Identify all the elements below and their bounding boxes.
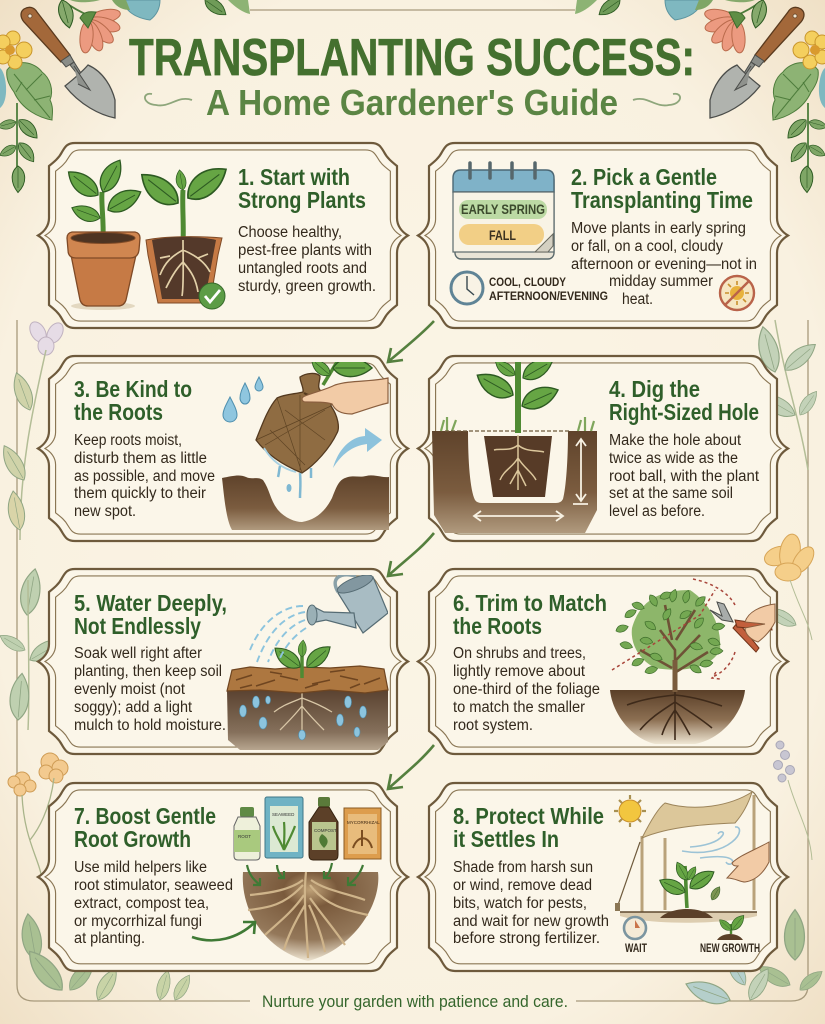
arrow between panels 4 and 5 (388, 533, 434, 576)
body text: as possible, and move (74, 468, 215, 485)
heading: Strong Plants (238, 187, 366, 213)
icon: mycorrhizal bag: MYCORRHIZAL (347, 820, 380, 825)
body text: soggy); add a light (74, 699, 193, 716)
arrow: to roots (192, 922, 255, 940)
body text: sturdy, green growth. (238, 278, 376, 295)
body text: new spot. (74, 503, 136, 520)
icon: pruners (710, 602, 772, 652)
body text: root ball, with the plant (609, 468, 760, 485)
body text: Choose healthy, (238, 224, 342, 241)
heading: 5. Water Deeply, (74, 590, 227, 616)
body text: pest-free plants with (238, 242, 372, 259)
body text: planting, then keep soil (74, 663, 222, 680)
body text: bits, watch for pests, (453, 895, 587, 912)
icon: plant with root ball (476, 362, 559, 497)
body text: Use mild helpers like (74, 859, 207, 876)
heading (453, 803, 604, 852)
heading: 8. Protect While (453, 803, 604, 829)
time label (489, 275, 608, 303)
icon: water drops (223, 377, 263, 422)
icon: hand (727, 842, 769, 882)
arrow between panels 2 and 3 (388, 321, 434, 362)
icon: root stimulator bottle: ROOT (238, 834, 251, 839)
heading: 4. Dig the (609, 376, 700, 402)
heading (74, 590, 227, 639)
arrow: depth (573, 439, 588, 504)
heading: 2. Pick a Gentle (571, 164, 717, 190)
heading (571, 164, 753, 213)
heading (238, 164, 366, 213)
icon: seaweed bag: SEAWEED (272, 812, 295, 817)
soil and roots (243, 872, 378, 961)
body text: Move plants in early spring (571, 220, 746, 237)
soil line (445, 430, 570, 432)
body text: mulch to hold moisture. (74, 717, 226, 734)
panel 7: boost gentle root growth (38, 783, 408, 971)
heading: Transplanting Time (571, 187, 753, 213)
body text: or fall, on a cool, cloudy (571, 238, 723, 255)
heading (453, 590, 607, 639)
trowel (21, 7, 115, 118)
icon: burlap root ball (256, 356, 372, 498)
heading: Root Growth (74, 826, 191, 852)
heading: 3. Be Kind to (74, 376, 192, 402)
top left floral corner with trowel (0, 0, 250, 193)
heading: the Roots (74, 399, 163, 425)
soil and roots (227, 690, 388, 750)
right side sprigs (683, 320, 825, 1009)
icon: mycorrhizal bag (344, 808, 381, 859)
body text: Shade from harsh sun (453, 859, 593, 876)
heading (609, 376, 759, 425)
icon: small green arrows (247, 863, 363, 885)
panel 4: dig the right-sized hole (418, 354, 788, 541)
mulch layer (227, 666, 388, 693)
icon: water drops in soil (240, 696, 366, 740)
panel 8: protect while it settles in (418, 783, 788, 971)
subtitle: A Home Gardener's Guide (206, 82, 618, 123)
body text: disturb them as little (74, 450, 207, 467)
icon: seaweed bag (265, 797, 303, 858)
top right floral corner with trowel (575, 0, 825, 193)
body text: them quickly to their (74, 485, 206, 502)
body text: one-third of the foliage (453, 681, 600, 698)
icon: seedling (270, 640, 335, 678)
body text: extract, compost tea, (74, 895, 209, 912)
body text: Keep roots moist, (74, 432, 182, 449)
icon: potted plant (63, 156, 145, 310)
body text: Soak well right after (74, 645, 202, 662)
body text (74, 645, 226, 734)
time label: AFTERNOON/EVENING (489, 289, 608, 303)
body text: level as before. (609, 503, 705, 520)
arrow between panels 6 and 7 (388, 745, 434, 789)
panel 2: pick a gentle transplanting time (418, 143, 788, 328)
body text: On shrubs and trees, (453, 645, 586, 662)
heading: Right-Sized Hole (609, 399, 759, 425)
heading: 6. Trim to Match (453, 590, 607, 616)
panel 3: be kind to the roots (38, 356, 408, 541)
soil with hole (222, 475, 389, 530)
body text: to match the smaller (453, 699, 585, 716)
icon: hand with pruners (745, 604, 775, 642)
icon: compost tea bottle (309, 797, 338, 860)
icon: clock (451, 272, 483, 304)
heading: Not Endlessly (74, 613, 201, 639)
body text: heat. (622, 291, 653, 308)
icon: hand (302, 378, 388, 414)
icon: root stimulator bottle (234, 807, 260, 860)
icon: plant on mound (657, 860, 723, 918)
icon: calendar: FALL (489, 227, 516, 243)
grass tufts (441, 417, 594, 431)
trim line (612, 579, 735, 679)
panel 6: trim to match the roots (418, 569, 788, 754)
body text: or wind, remove dead (453, 877, 592, 894)
body text: set at the same soil (609, 485, 733, 502)
body text: before strong fertilizer. (453, 930, 600, 947)
body text: Make the hole about (609, 432, 742, 449)
body text: evenly moist (not (74, 681, 186, 698)
heading (74, 803, 216, 852)
icon labels: WAIT (625, 941, 647, 955)
soil cross-section (432, 431, 597, 533)
body text (453, 645, 600, 734)
body text: afternoon or evening—not in (571, 256, 757, 273)
icon: watering can (307, 571, 388, 633)
body text: or mycorrhizal fungi (74, 913, 202, 930)
body text: at planting. (74, 930, 145, 947)
heading: it Settles In (453, 826, 559, 852)
icon: wind (682, 827, 740, 864)
icon labels (625, 941, 760, 955)
body text (74, 859, 233, 947)
icon: sun (614, 795, 646, 827)
heading: 1. Start with (238, 164, 350, 190)
body text (453, 859, 609, 947)
body text: root stimulator, seaweed (74, 877, 233, 894)
body text: root system. (453, 717, 533, 734)
icon: check mark (199, 283, 225, 309)
icon: wait gauge (624, 917, 646, 939)
heading: 7. Boost Gentle (74, 803, 216, 829)
body text (238, 224, 376, 295)
heading (74, 376, 192, 425)
body text: and wait for new growth (453, 913, 609, 930)
icon: calendar: EARLY SPRING (461, 201, 545, 217)
panel 5: water deeply (38, 569, 408, 754)
ground shadow (620, 912, 757, 923)
icon: shade canopy (615, 792, 754, 912)
body text: midday summer (609, 273, 713, 290)
arrow: width (474, 511, 563, 521)
body text: lightly remove about (453, 663, 586, 680)
body text (74, 432, 215, 520)
left side sprigs (0, 319, 194, 1003)
body text: untangled roots and (238, 260, 367, 277)
panel 1: start with strong plants (38, 143, 408, 328)
soil and tree roots (610, 690, 745, 744)
time label: COOL, CLOUDY (489, 275, 566, 289)
ground line (620, 911, 757, 913)
heading: the Roots (453, 613, 542, 639)
icon: new growth (717, 912, 747, 940)
icon: calendar (453, 163, 554, 259)
icon: plant with visible roots (135, 160, 232, 309)
body text (609, 432, 760, 520)
body text: twice as wide as the (609, 450, 738, 467)
body text (571, 220, 757, 308)
icon: water stream (250, 606, 306, 662)
footer text: Nurture your garden with patience and care. (262, 992, 568, 1011)
icon labels: NEW GROWTH (700, 941, 760, 955)
icon: tree (615, 588, 725, 692)
arrow: moving (333, 428, 382, 468)
icon: compost tea bottle: COMPOST (314, 828, 337, 833)
icon: no midday sun (720, 276, 754, 310)
